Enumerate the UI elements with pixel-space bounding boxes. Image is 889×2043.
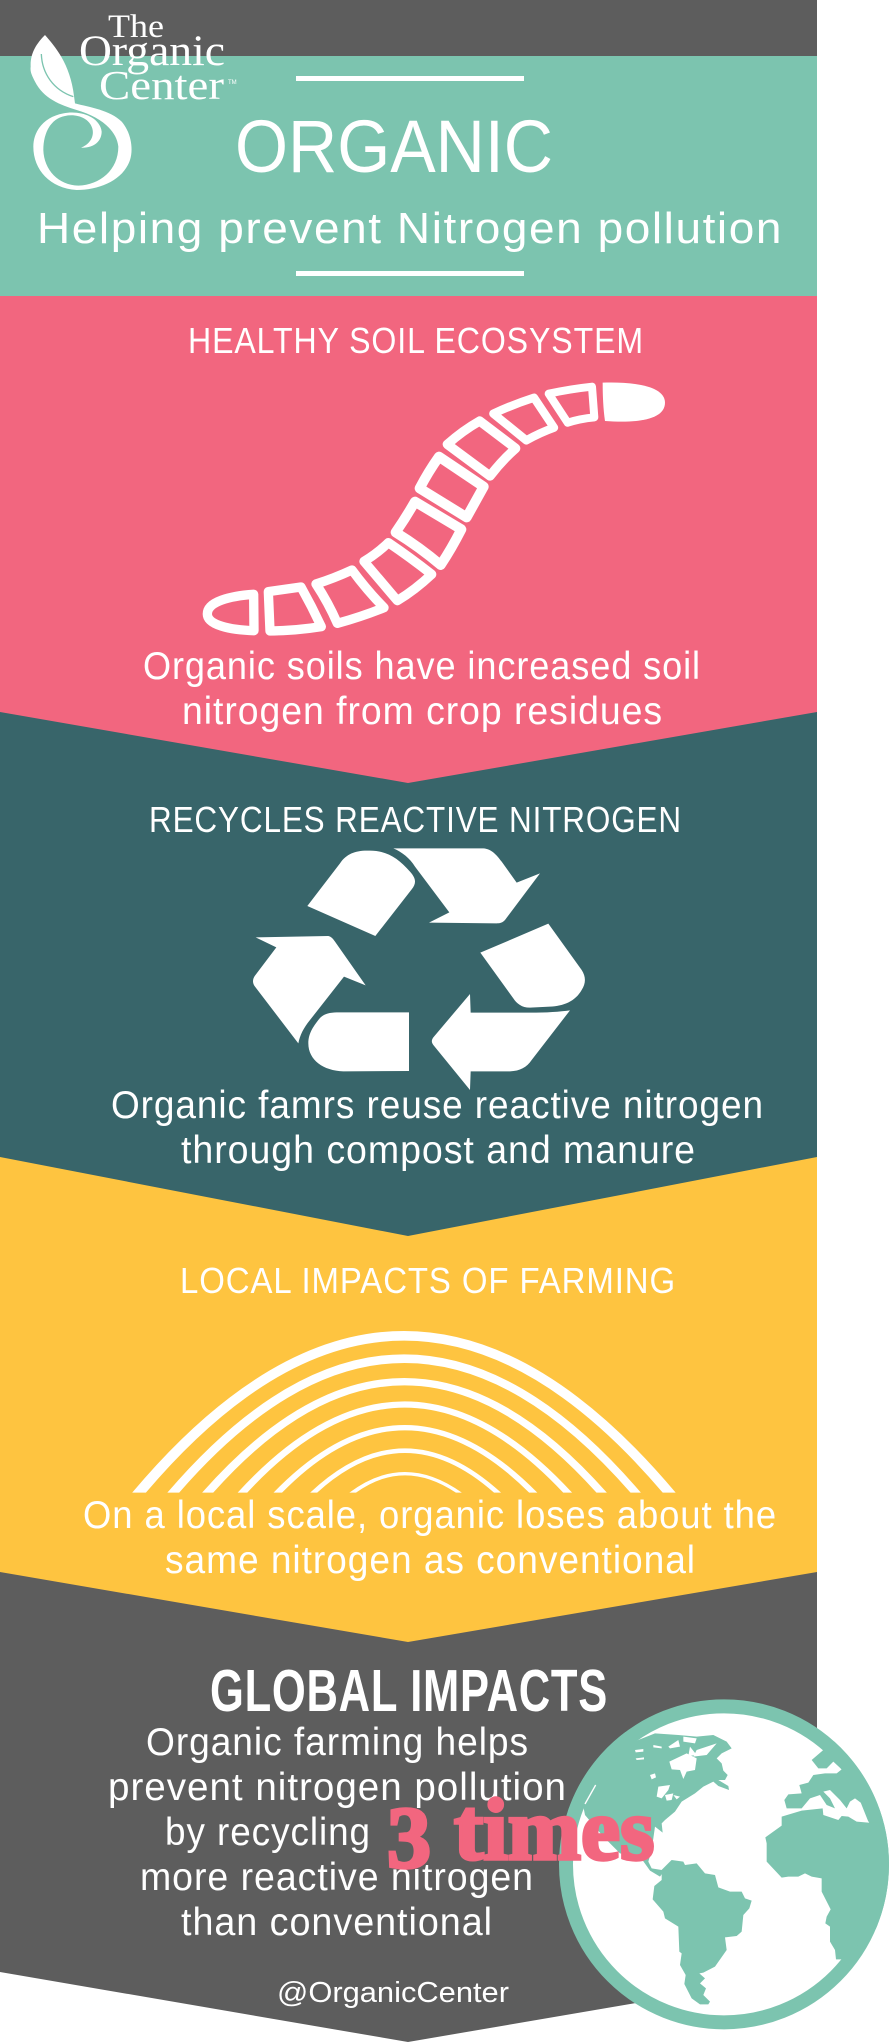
text: global impacts body: by recycling (165, 1811, 371, 1854)
title: ORGANIC (235, 105, 553, 188)
text: global impacts body: more reactive nitrogen (140, 1856, 534, 1899)
icon: recycling symbol (253, 848, 585, 1090)
heading: recycles reactive nitrogen: RECYCLES REACTIVE NITROGEN (149, 799, 682, 840)
logo wordmark: Center: Center (99, 62, 224, 108)
text: organic soils: nitrogen from crop residues (182, 690, 663, 733)
logo: The Organic Center (31, 9, 237, 190)
north america (568, 1732, 732, 1876)
panel: local impacts (0, 1150, 817, 1642)
subtitle: Helping prevent Nitrogen pollution (37, 204, 783, 253)
logo trademark: TM (228, 80, 237, 86)
text: global impacts body: than conventional (181, 1901, 493, 1944)
europe (784, 1737, 889, 1822)
logo wordmark: The: The (108, 9, 164, 45)
text: local scale: On a local scale, organic loses about the (83, 1494, 777, 1537)
logo wordmark: Organic: Organic (79, 28, 225, 75)
title rule bottom (296, 271, 524, 276)
icon: globe (560, 1706, 889, 2022)
title rule top (296, 76, 524, 81)
text: organic soils (143, 645, 701, 733)
text: local scale: same nitrogen as conventional (165, 1539, 696, 1582)
icon: soil arches (132, 1331, 676, 1493)
panel: healthy soil ecosystem (0, 296, 817, 783)
text: global impacts body (108, 1721, 567, 1944)
text: global impacts body: Organic farming helps (146, 1721, 529, 1764)
panel: title header (0, 56, 817, 296)
text: organic soils: Organic soils have increased soil (143, 645, 701, 688)
heading: global impacts: GLOBAL IMPACTS (210, 1658, 608, 1724)
text: organic farmers: Organic famrs reuse reactive nitrogen (111, 1084, 764, 1127)
south america (653, 1860, 752, 2004)
heading: local impacts of farming: LOCAL IMPACTS OF FARMING (180, 1260, 676, 1301)
callout: 3 times: 3 (387, 1790, 431, 1887)
icon: worm (207, 383, 665, 631)
panel: recycles reactive nitrogen (0, 700, 817, 1236)
text: local scale (83, 1494, 777, 1582)
africa (765, 1808, 889, 1959)
text: organic farmers (111, 1084, 764, 1172)
text: organic farmers: through compost and manure (181, 1129, 696, 1172)
logo sprout icon (31, 35, 132, 190)
text: global impacts body: prevent nitrogen pollution (108, 1766, 567, 1809)
handle: @OrganicCenter (277, 1977, 509, 2009)
callout: 3 times: times (454, 1782, 654, 1879)
heading: healthy soil ecosystem: HEALTHY SOIL ECOSYSTEM (188, 320, 644, 361)
